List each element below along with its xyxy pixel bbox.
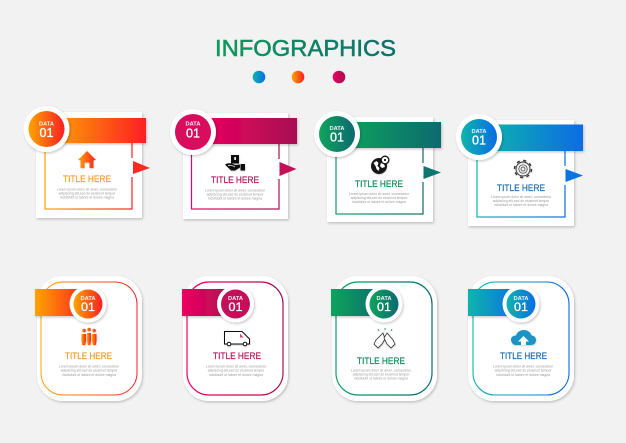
icon: house (78, 151, 96, 168)
badge (366, 286, 402, 322)
badge: 01 (186, 126, 200, 140)
badge: DATA (472, 129, 486, 135)
text block: Lorem ipsum dolor sit amet, consectetur (493, 364, 554, 368)
icon: van (224, 332, 250, 346)
text block: adipiscing elit,sed do eiusmod tempor (59, 192, 116, 196)
text block (351, 368, 412, 380)
heading: TITLE HERE (63, 174, 111, 185)
text block: Lorem ipsum dolor sit amet, consectetur (59, 364, 120, 368)
badge (24, 106, 70, 152)
panel: card 6 pink rounded (182, 276, 288, 401)
heading: TITLE HERE (213, 351, 261, 362)
badge: 01 (40, 126, 54, 140)
banner (341, 122, 441, 148)
badge: DATA (330, 126, 344, 132)
text block (205, 188, 266, 200)
icon: cloud upload (511, 330, 536, 345)
text block (57, 188, 118, 200)
panel: card 5 orange rounded (35, 276, 142, 401)
text block: adipiscing elit,sed do eiusmod tempor (353, 372, 410, 376)
banner (483, 124, 583, 151)
text block: Lorem ipsum dolor sit amet, consectetur (57, 188, 118, 192)
heading: TITLE HERE (355, 179, 403, 190)
arrow (133, 161, 150, 174)
heading: TITLE HERE (357, 356, 405, 367)
panel: card 4 blue square (456, 114, 583, 226)
heading: TITLE HERE (211, 175, 259, 186)
text block: Lorem ipsum dolor sit amet, consectetur (349, 192, 410, 196)
banner (331, 289, 384, 316)
text block: Lorem ipsum dolor sit amet, consectetur (206, 364, 267, 368)
arrow (280, 162, 296, 176)
banner (468, 289, 521, 316)
dots row (253, 71, 345, 83)
icon: gear (514, 160, 532, 178)
heading: TITLE HERE (65, 351, 112, 362)
arrow (424, 166, 441, 179)
badge: DATA (376, 296, 392, 302)
text block (349, 192, 410, 204)
arrow (566, 169, 583, 182)
text block: incididunt ut labore et dolore magna (208, 196, 262, 200)
banner (197, 118, 297, 144)
text block (206, 364, 267, 377)
text block: incididunt ut labore et dolore magna (209, 373, 263, 377)
text block: Lorem ipsum dolor sit amet, consectetur (351, 368, 412, 372)
panel: card 1 orange square (24, 106, 150, 218)
panel: card 2 pink square (170, 109, 297, 219)
badge: DATA (39, 122, 54, 128)
text block: adipiscing elit,sed do eiusmod tempor (351, 196, 408, 200)
text block: incididunt ut labore et dolore magna (494, 203, 548, 207)
badge (502, 286, 540, 322)
badge: DATA (228, 296, 243, 302)
text block: adipiscing elit,sed do eiusmod tempor (208, 368, 265, 372)
badge: 01 (330, 130, 344, 144)
badge (217, 286, 254, 322)
panel: card 3 green square (314, 111, 441, 222)
icon: clapping hands (374, 328, 395, 348)
panel: card 7 green rounded (331, 276, 437, 401)
text block: Lorem ipsum dolor sit amet, consectetur (205, 188, 266, 192)
text block: incididunt ut labore et dolore magna (62, 373, 116, 377)
text block: Lorem ipsum dolor sit amet, consectetur (491, 195, 552, 199)
badge (456, 114, 502, 160)
badge: DATA (80, 296, 96, 302)
badge: 01 (472, 134, 486, 148)
heading: TITLE HERE (497, 183, 545, 194)
text block: incididunt ut labore et dolore magna (352, 200, 406, 204)
badge: DATA (514, 296, 529, 302)
badge: 01 (228, 300, 243, 314)
text block (491, 195, 552, 207)
text block (59, 364, 120, 377)
text block: adipiscing elit,sed do eiusmod tempor (493, 199, 550, 203)
icon: hand with box (225, 155, 245, 170)
badge: 01 (514, 300, 528, 314)
badge (70, 286, 106, 322)
icon: people (82, 328, 96, 345)
panel: card 8 blue rounded (468, 276, 574, 401)
badge: 01 (81, 300, 95, 314)
title: INFOGRAPHICS (215, 35, 396, 61)
text block: incididunt ut labore et dolore magna (496, 373, 550, 377)
banner (50, 118, 146, 143)
text block: incididunt ut labore et dolore magna (354, 376, 408, 380)
icon: globe with pin (371, 156, 389, 174)
text block: incididunt ut labore et dolore magna (60, 196, 114, 200)
text block: adipiscing elit,sed do eiusmod tempor (61, 368, 118, 372)
text block: adipiscing elit,sed do eiusmod tempor (207, 192, 264, 196)
banner (182, 289, 236, 316)
text block: adipiscing elit,sed do eiusmod tempor (495, 368, 552, 372)
badge (170, 109, 216, 155)
badge: DATA (186, 122, 200, 128)
banner (35, 289, 88, 316)
heading: TITLE HERE (500, 351, 547, 362)
badge: 01 (377, 300, 391, 314)
badge (314, 111, 360, 157)
text block (493, 364, 554, 377)
